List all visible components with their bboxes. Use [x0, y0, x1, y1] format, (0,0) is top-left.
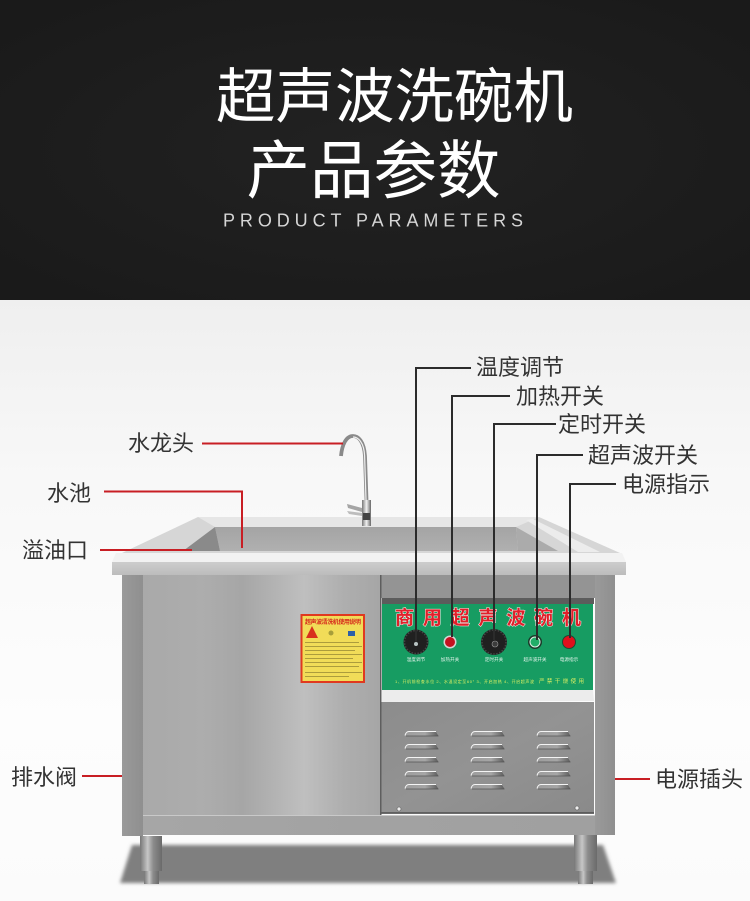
- callout: drain valve: [11, 765, 122, 790]
- subtitle: product parameters: 产品参数: [246, 137, 500, 207]
- callout: timer switch: 定时开关: [558, 412, 646, 437]
- callout: temperature control: [416, 355, 564, 642]
- warning label: [302, 615, 364, 682]
- callout: drain valve: 排水阀: [11, 765, 77, 790]
- callout: heating switch: 加热开关: [516, 384, 604, 409]
- english subtitle: PRODUCT PARAMETERS: [223, 210, 523, 230]
- control captions: 温度调节: [407, 656, 426, 663]
- knob: temperature: [404, 630, 428, 654]
- knob: timer: [481, 629, 507, 655]
- vent slats: [405, 732, 570, 789]
- vent panel: [382, 702, 594, 814]
- control captions: 加热开关: [441, 656, 460, 663]
- button: ultrasonic: [528, 635, 542, 649]
- leg right: [574, 835, 597, 884]
- callout: timer switch: [494, 412, 646, 640]
- callout: power indicator: [570, 472, 710, 638]
- callout: oil overflow: 溢油口: [22, 538, 88, 563]
- sink top: [112, 517, 626, 575]
- header background: [0, 0, 750, 300]
- leg left: [140, 836, 162, 884]
- callout: power indicator: 电源指示: [622, 472, 710, 497]
- upper strip of control bay: [380, 575, 595, 604]
- indicator: power: [562, 635, 576, 649]
- bottom rail: [143, 815, 595, 835]
- page background: [0, 300, 750, 901]
- button: heating: [444, 636, 456, 648]
- control captions: 定时开关: [485, 656, 504, 663]
- panel footnotes: 1、开机前检查水位 2、水温设定至60° 3、开启加热 4、开启超声波: [395, 678, 534, 684]
- callout: sink basin: [47, 481, 242, 548]
- callout: heating switch: [452, 384, 604, 637]
- callout: power plug: [615, 767, 743, 792]
- control captions: [407, 656, 579, 663]
- machine: dishwasher: [112, 436, 626, 884]
- title: 超声波洗碗机: [216, 64, 573, 130]
- faucet: [341, 436, 371, 526]
- callout: ultrasonic switch: 超声波开关: [588, 443, 698, 468]
- callout: power plug: 电源插头: [655, 767, 743, 792]
- screws: [397, 806, 579, 811]
- panel title: 商用超声波碗机: [395, 606, 581, 629]
- side panel left: [122, 575, 143, 836]
- callout: temperature control: 温度调节: [476, 355, 564, 380]
- panel footnotes: [395, 677, 584, 685]
- white strip under control panel: [382, 690, 594, 702]
- control panel: [382, 604, 593, 690]
- control captions: 电源指示: [560, 656, 579, 663]
- control captions: 超声波开关: [524, 656, 547, 663]
- callout: ultrasonic switch: [537, 443, 698, 640]
- callout: faucet: 水龙头: [128, 431, 194, 456]
- panel footnotes: 严禁干烧使用: [539, 677, 584, 685]
- side panel right: [595, 575, 615, 835]
- floor shadow: [120, 845, 616, 883]
- divider between door and bays: [380, 575, 382, 815]
- warning label: 超声波清洗机使用说明: [305, 618, 361, 626]
- callout: sink basin: 水池: [47, 481, 91, 506]
- door panel: [143, 575, 380, 815]
